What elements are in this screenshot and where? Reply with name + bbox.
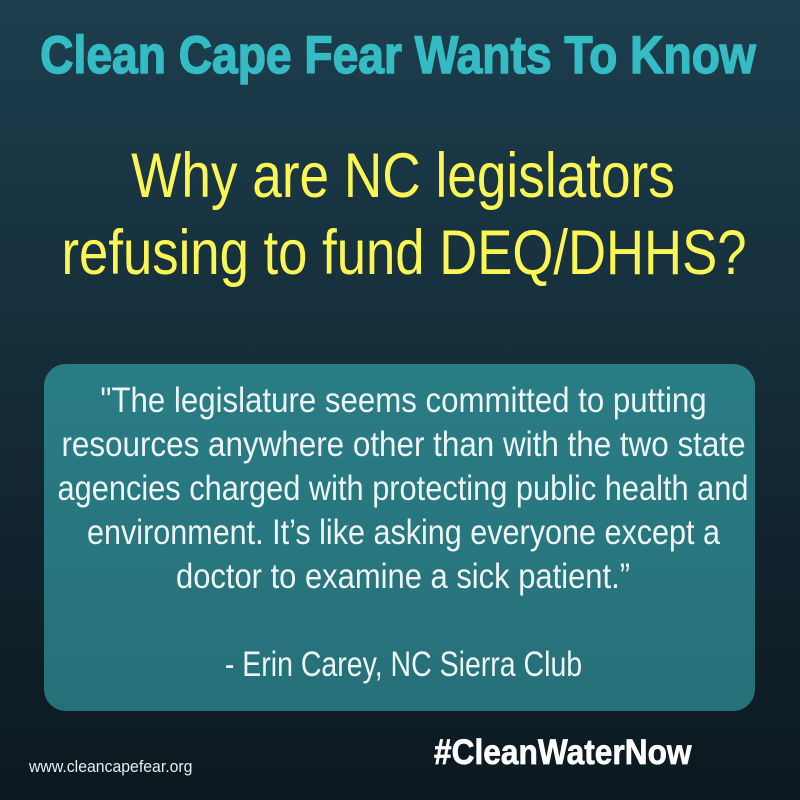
question heading: refusing to fund DEQ/DHHS? — [62, 218, 746, 288]
quote text — [58, 381, 748, 684]
title: Clean Cape Fear Wants To Know — [40, 26, 756, 85]
quote text: agencies charged with protecting public health and — [58, 469, 748, 508]
quote text: - Erin Carey, NC Sierra Club — [225, 645, 582, 684]
quote text: environment. It’s like asking everyone except a — [87, 513, 720, 552]
quote text: "The legislature seems committed to putting — [100, 381, 707, 420]
website link: www.cleancapefear.org — [29, 757, 192, 776]
panel: quote — [44, 364, 755, 711]
quote text: resources anywhere other than with the two state — [61, 425, 746, 464]
hashtag: #CleanWaterNow — [434, 733, 692, 772]
question heading: Why are NC legislators — [131, 141, 675, 211]
quote text: doctor to examine a sick patient.” — [176, 557, 630, 596]
question heading — [62, 141, 746, 288]
